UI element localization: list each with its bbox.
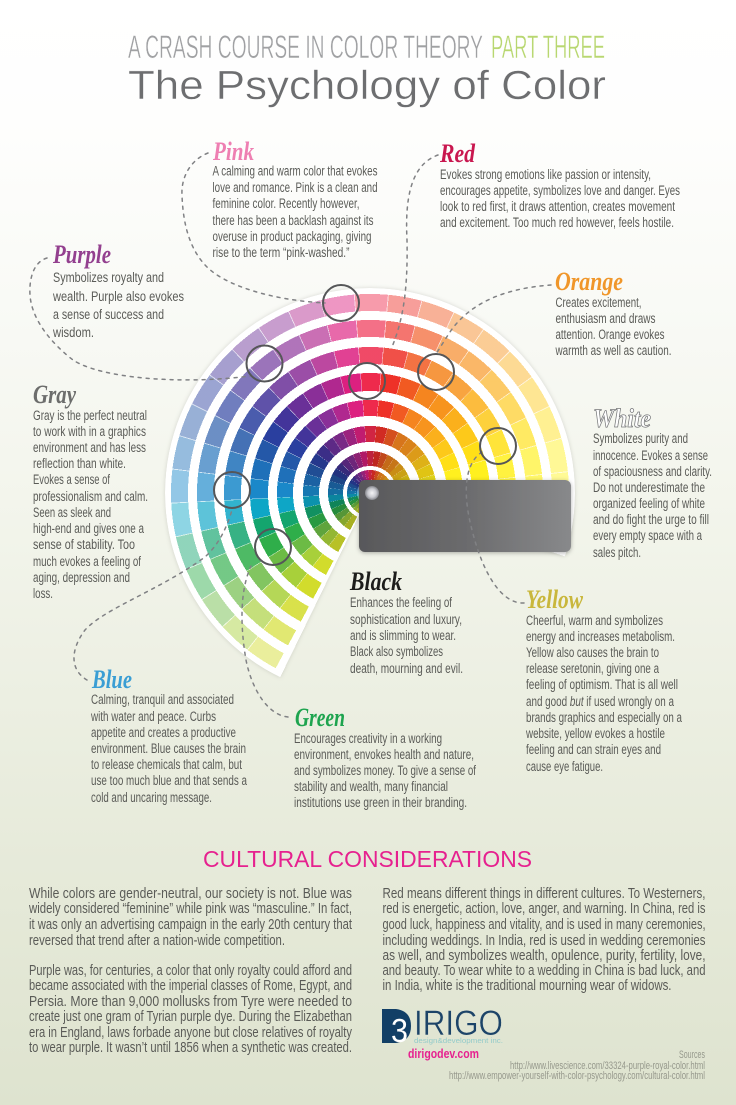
text block: cultural left column: became associated with the imperial classes of Rome, Egypt, and (29, 977, 352, 994)
text block: orange: enthusiasm and draws (556, 311, 656, 326)
title: main heading: The Psychology of Color (128, 62, 606, 108)
heading: red: Red (439, 139, 476, 168)
text block: black (350, 595, 463, 676)
text block: green: Encourages creativity in a working (294, 731, 442, 746)
text block: gray: sense of stability. Too (33, 537, 135, 552)
text block: cultural left column: While colors are gender-neutral, our society is not. Blue was (29, 885, 352, 902)
text block: pink: A calming and warm color that evokes (212, 164, 378, 178)
text block: cultural left column: create just one gram of Tyrian purple dye. During the Elizabethan (29, 1008, 352, 1025)
text block: blue: cold and uncaring message. (91, 790, 212, 805)
panel: red (439, 139, 680, 230)
heading: green: Green (295, 703, 345, 732)
text block: gray: Seen as sleek and (33, 505, 111, 520)
text block: purple: wealth. Purple also evokes (52, 289, 184, 304)
text block: yellow: and good but if used wrongly on a (526, 694, 674, 709)
logo: dirigo: design&development inc. (414, 1036, 503, 1045)
text block: orange: Creates excitement, (556, 295, 642, 310)
text block: cultural left column: to wear purple. It wasn’t until 1856 when a synthetic was created. (29, 1039, 352, 1056)
panel: white (593, 404, 712, 560)
text block: orange (555, 295, 672, 358)
title: series line: PART THREE (491, 29, 605, 65)
text block: black: Enhances the feeling of (350, 595, 452, 610)
text block: red (440, 167, 680, 230)
text block: cultural right column (382, 885, 706, 994)
swatch tag (359, 480, 571, 552)
heading: pink: Pink (212, 137, 254, 166)
website link text: dirigodev.com (408, 1047, 479, 1061)
panel: orange (555, 267, 672, 358)
heading: gray: Gray (33, 380, 76, 409)
text block: green: and symbolizes money. To give a sense of (294, 763, 476, 778)
text block: yellow: Yellow also causes the brain to (526, 645, 659, 660)
heading: purple: Purple (52, 240, 111, 269)
text block: pink (212, 164, 378, 260)
text block: sources (449, 1049, 705, 1082)
heading: blue: Blue (91, 665, 132, 694)
text block: blue: Calming, tranquil and associated (91, 692, 234, 707)
logo: dirigo: 3 (391, 1012, 408, 1049)
logo: dirigo (382, 1004, 503, 1049)
text block: black: and is slimming to wear. (350, 628, 456, 643)
text block: blue: to release chemicals that calm, but (91, 757, 242, 772)
text block: gray: Gray is the perfect neutral (33, 408, 147, 423)
text block: red: Evokes strong emotions like passion or intensity, (440, 167, 651, 182)
text block: blue: with water and peace. Curbs (90, 709, 216, 724)
text block: yellow: cause eye fatigue. (526, 759, 603, 774)
text block: green: institutions use green in their branding. (294, 795, 467, 810)
text block: cultural left column: reversed that trend after a nation-wide competition. (29, 932, 285, 949)
text block: green: environment, envokes health and nature, (294, 747, 474, 762)
dashed connector lines (30, 153, 551, 717)
text block: blue: environment. Blue causes the brain (91, 741, 246, 756)
text block: black: Black also symbolizes (350, 644, 443, 659)
text block: gray: Evokes a sense of (33, 472, 110, 487)
title block (128, 29, 606, 108)
panel: yellow (525, 585, 682, 774)
text block: yellow: energy and increases metabolism. (526, 629, 675, 644)
text block: cultural left column: widely considered “feminine” while pink was “masculine.” In fact, (28, 900, 352, 917)
text block: blue: use too much blue and that sends a (91, 773, 247, 788)
text block: yellow: Cheerful, warm and symbolizes (526, 613, 663, 628)
text block: cultural left column: Persia. More than 9,000 mollusks from Tyre were needed to (29, 993, 352, 1010)
text block: orange: warmth as well as caution. (555, 343, 672, 358)
text block: green: stability and wealth, many financial (294, 779, 448, 794)
logo: dirigo: IRIGO (414, 1004, 503, 1043)
text block: yellow: feeling and can strain eyes and (526, 742, 661, 757)
text block: blue (90, 692, 247, 805)
text block: cultural left column (28, 885, 353, 1056)
text block: yellow: brands graphics and especially on a (526, 710, 682, 725)
heading: yellow: Yellow (526, 585, 584, 614)
text block: black: death, mourning and evil. (350, 661, 463, 676)
text block: purple: a sense of success and (53, 307, 164, 322)
text block: gray: loss. (33, 586, 53, 601)
text block: pink: overuse in product packaging, giving (212, 229, 372, 244)
text block: gray: much evokes a feeling of (33, 554, 141, 569)
text block: pink: rise to the term “pink-washed.” (212, 245, 350, 260)
text block: gray (33, 408, 148, 601)
text block: yellow: release seretonin, giving one a (526, 661, 659, 676)
text block: gray: environment and has less (33, 440, 146, 455)
text block: pink: love and romance. Pink is a clean and (212, 180, 378, 195)
text block: yellow: website, yellow evokes a hostile (525, 726, 665, 741)
text block: yellow (525, 613, 682, 774)
text block: white (593, 431, 712, 560)
text block: white: Symbolizes purity and (593, 431, 688, 446)
text block: white: sales pitch. (593, 545, 641, 560)
heading: orange: Orange (555, 267, 623, 296)
text block: gray: professionalism and calm. (33, 489, 148, 504)
text block: purple: Symbolizes royalty and (53, 270, 164, 285)
text block: purple: wisdom. (52, 325, 94, 340)
chart: fanned color swatch wheel (164, 286, 576, 678)
text block: orange: attention. Orange evokes (556, 327, 665, 342)
heading: white: White (593, 404, 651, 433)
title: series line: A CRASH COURSE IN COLOR THEORY (128, 29, 483, 65)
text block: gray: high-end and gives one a (33, 521, 144, 536)
text block: sources: Sources (679, 1049, 705, 1061)
text block: cultural left column: era in England, laws forbade anyone but close relatives of royalty (29, 1024, 352, 1041)
text block: blue: appetite and creates a productive (91, 725, 236, 740)
text block: gray: to work with in a graphics (33, 424, 146, 439)
text block: yellow: feeling of optimism. That is all well (526, 677, 678, 692)
text block: pink: there has been a backlash against its (212, 213, 374, 228)
text block: cultural left column: it was only an advertising campaign in the early 20th century that (29, 916, 353, 933)
text block: gray: aging, depression and (33, 570, 130, 585)
heading: cultural considerations: CULTURAL CONSIDERATIONS (203, 846, 532, 872)
panel: gray (33, 380, 148, 601)
text block: green (294, 731, 476, 810)
panel: blue (90, 665, 247, 805)
text block: pink: feminine color. Recently however, (212, 196, 360, 211)
text block: black: sophistication and luxury, (350, 612, 462, 627)
panel: black (349, 567, 463, 676)
panel: green (294, 703, 476, 810)
panel: purple (52, 240, 184, 340)
text block: gray: reflection than white. (33, 456, 126, 471)
text block: cultural left column: Purple was, for centuries, a color that only royalty could afford and (29, 962, 352, 979)
text block: purple (52, 270, 184, 340)
highlight circles on swatches (214, 285, 516, 565)
heading: black: Black (349, 567, 402, 596)
panel: pink (212, 137, 378, 260)
